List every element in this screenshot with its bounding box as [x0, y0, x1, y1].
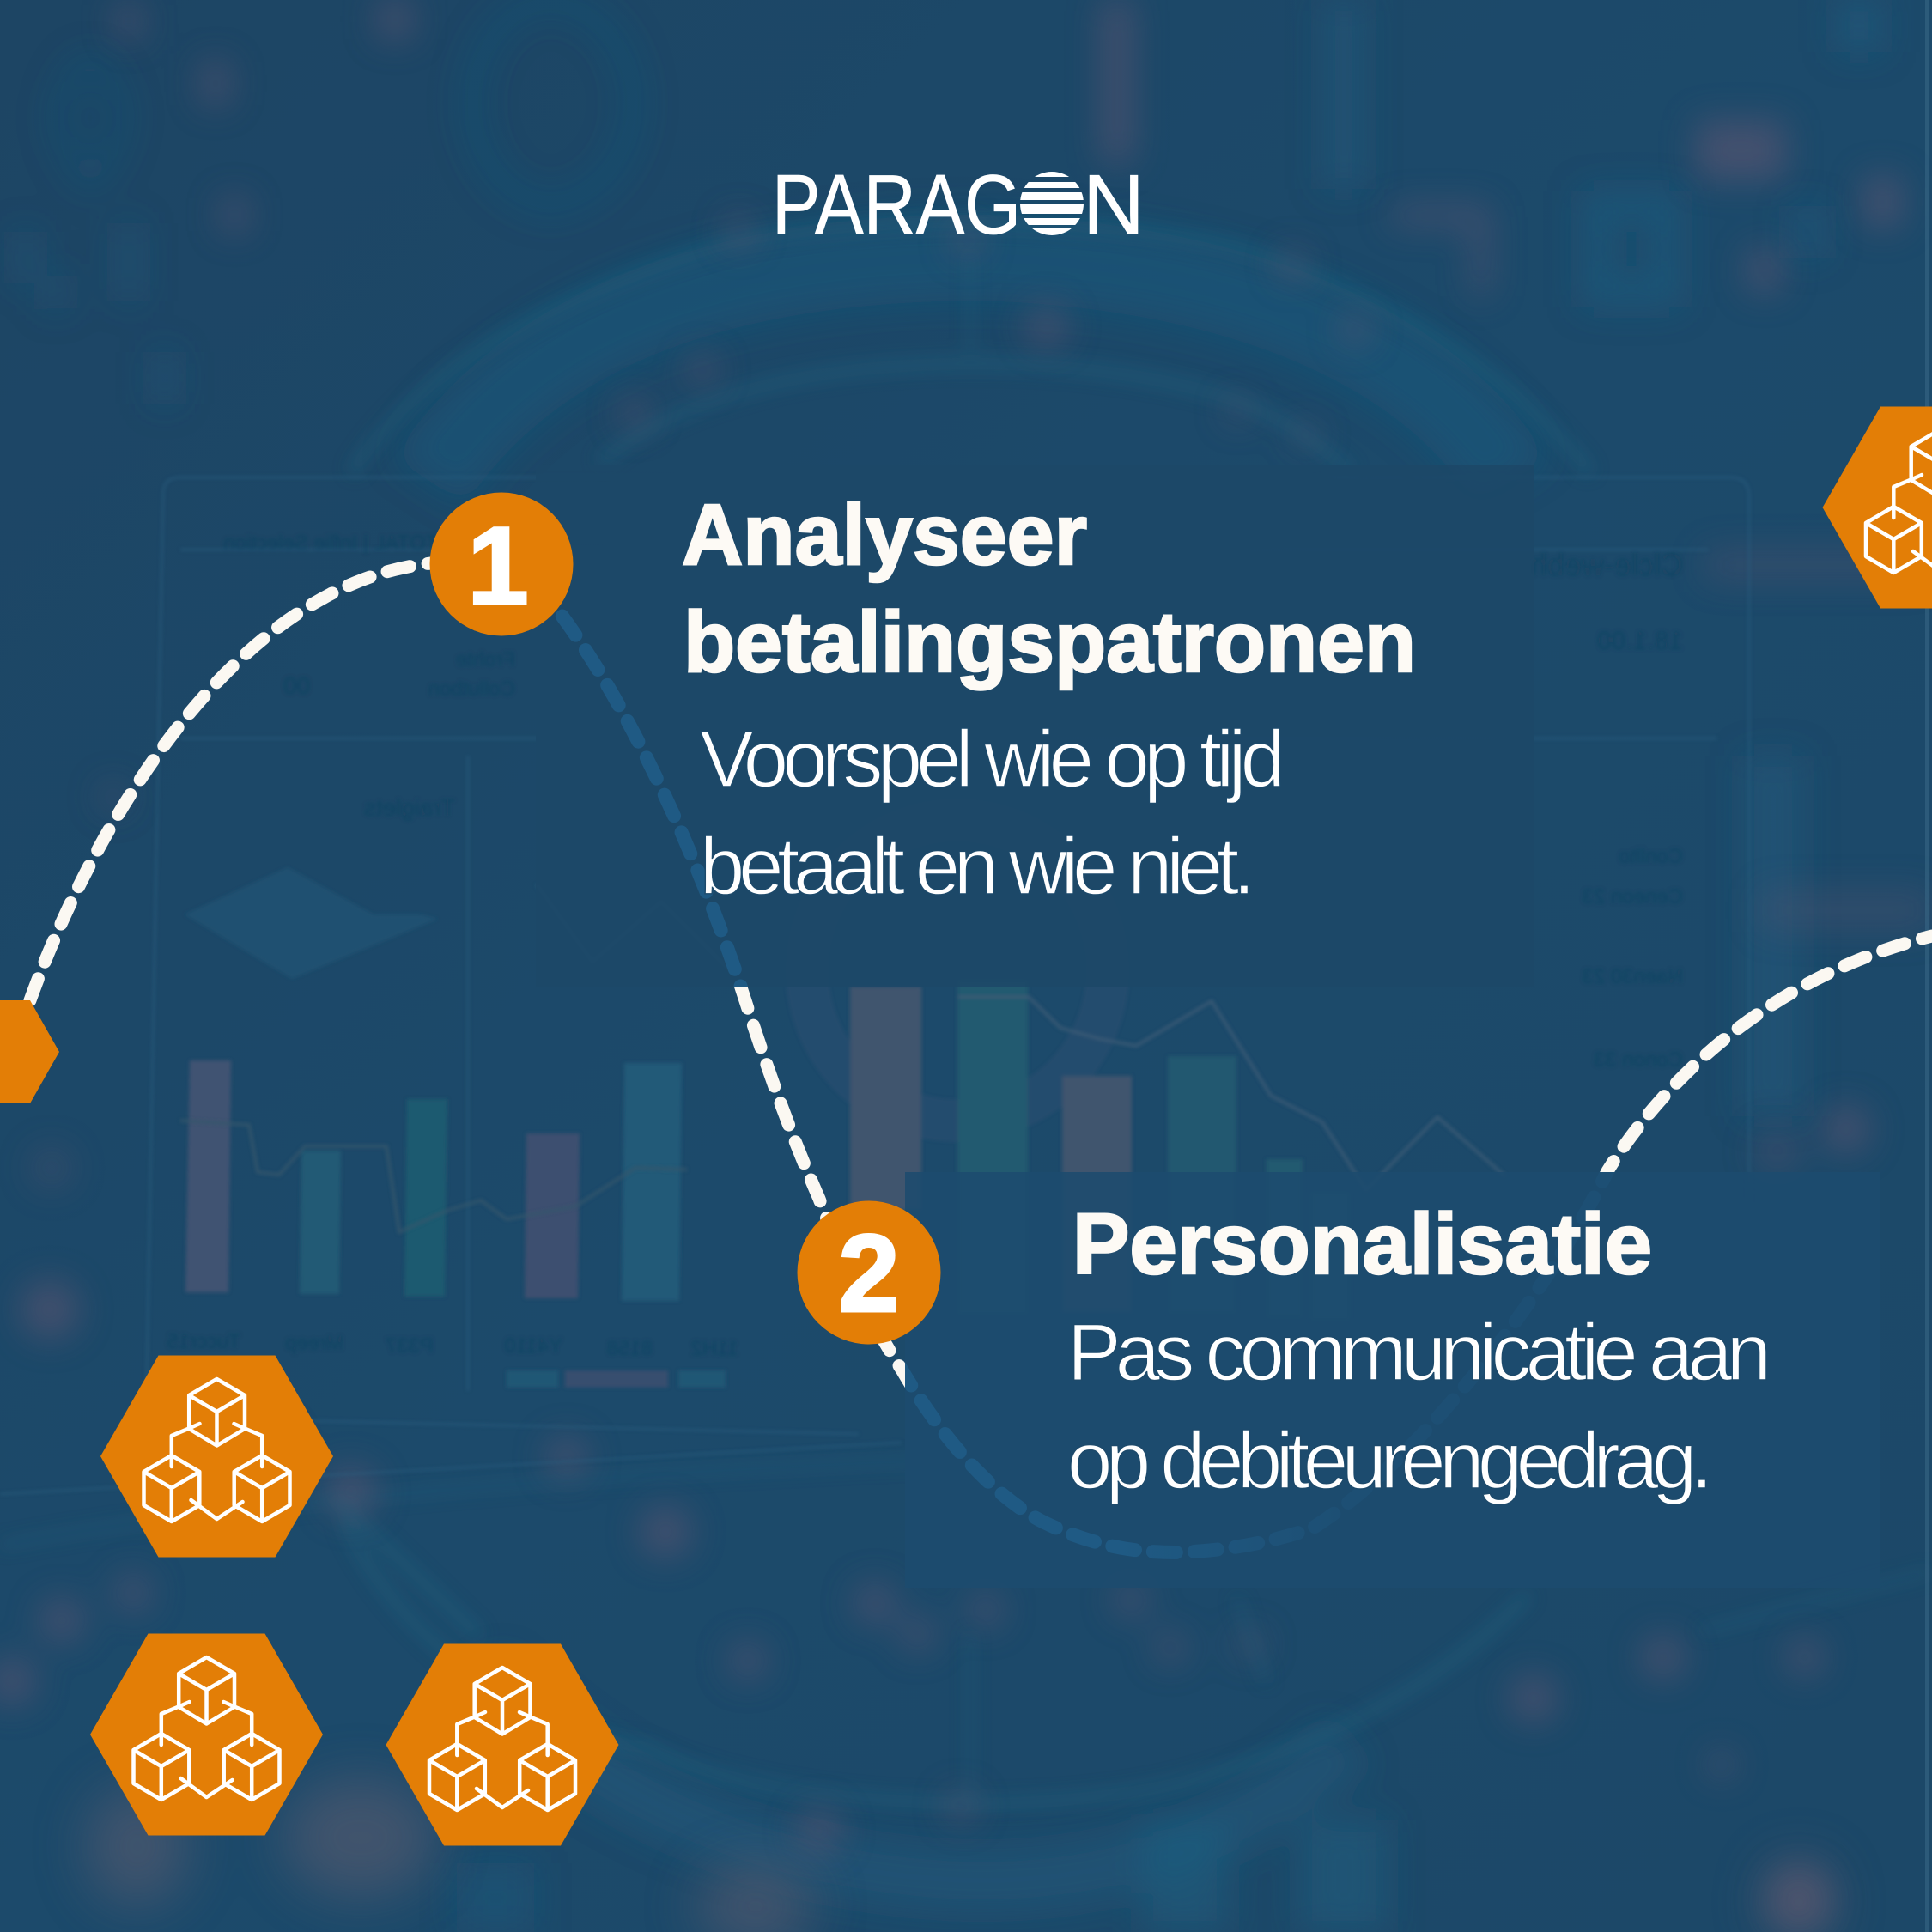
dashes outside the text panels: [734, 929, 1932, 1388]
step 2 body text: op debiteurengedrag.: [1067, 1415, 1713, 1505]
step 2 number badge: [797, 1200, 941, 1345]
step 1 heading: Analyseer: [682, 487, 1087, 583]
logo globe: [1018, 172, 1086, 235]
step 1 number badge: [429, 493, 574, 635]
background mirrored dashboard labels: P337: [386, 1334, 434, 1358]
background mirrored dashboard labels: 18.1.00: [1597, 627, 1683, 655]
step 1 body text: betaalt en wie niet.: [700, 821, 1255, 911]
background bar chart: right: [807, 820, 1505, 1321]
step 1 body text: Voorspel wie op tijd: [700, 714, 1285, 804]
step 1 heading: [682, 487, 1416, 690]
background right edge line: [1925, 0, 1929, 1932]
step 1 heading: betalingspatronen: [683, 594, 1416, 690]
background mirrored dashboard labels: Conllto: [1619, 845, 1683, 868]
step 1 number badge: 1: [467, 505, 529, 628]
step 2 heading: Personalisatie: [1072, 1196, 1652, 1292]
step 1 body text: [700, 714, 1285, 911]
icon: hexagon with cubes, right edge: [1822, 407, 1932, 608]
icon: hexagon with cubes, lower middle: [386, 1643, 618, 1846]
background mirrored dashboard labels: 00: [283, 672, 310, 699]
background mirrored dashboard labels: Naen30 23: [1583, 965, 1683, 988]
logo: Paragon: PARAG: [772, 157, 1021, 252]
background mirrored dashboard labels: Frohte: [456, 648, 515, 671]
background mirrored dashboard labels: Y4110: [504, 1334, 562, 1358]
background dashboard panel frame: [0, 477, 1749, 1494]
background line charts: [180, 867, 730, 1232]
icon: hexagon with cubes, lower left bottom: [90, 1633, 323, 1836]
background mirrored dashboard labels: Traiglets: [364, 794, 455, 821]
background mirrored dashboard labels: Mreep: [285, 1332, 343, 1355]
background mirrored dashboard labels: TOTAL | Inflie Selection: [223, 532, 438, 555]
background mirrored dashboard labels: Conon 33: [1594, 1048, 1683, 1072]
translucent text panel: step 1: [536, 465, 1534, 987]
background bar chart: left: [185, 1060, 726, 1388]
background mirrored dashboard labels: Ceneon 23: [1583, 885, 1683, 908]
step 2 number badge: 2: [838, 1212, 900, 1335]
step 2 body text: [1067, 1307, 1771, 1505]
background mirrored dashboard labels: Clcle-webh: [1530, 547, 1683, 582]
background mirrored dashboard labels: Tuccr15: [167, 1330, 240, 1353]
background glow: large lower-left haze: [86, 1777, 1833, 1932]
logo: Paragon: N: [1083, 157, 1145, 252]
icon: plain hexagon, left edge: [0, 1000, 59, 1103]
step 2 body text: Pas communicatie aan: [1067, 1307, 1771, 1397]
background mirrored dashboard labels: 11H2: [690, 1337, 738, 1360]
translucent text panel: step 2: [905, 1172, 1880, 1588]
dashes tinted behind the text panels: [555, 610, 1310, 1559]
background mirrored dashboard labels: Collutbon: [428, 677, 515, 701]
icon: hexagon with cubes, lower left top: [100, 1355, 333, 1558]
background mirrored dashboard labels: [167, 532, 1683, 1360]
dashed path: left hexagon to circle 1: [30, 563, 431, 1000]
background mirrored dashboard labels: 8158: [607, 1337, 653, 1360]
dashed path: circle 1 through circle 2 to right edge: [537, 584, 1932, 1552]
